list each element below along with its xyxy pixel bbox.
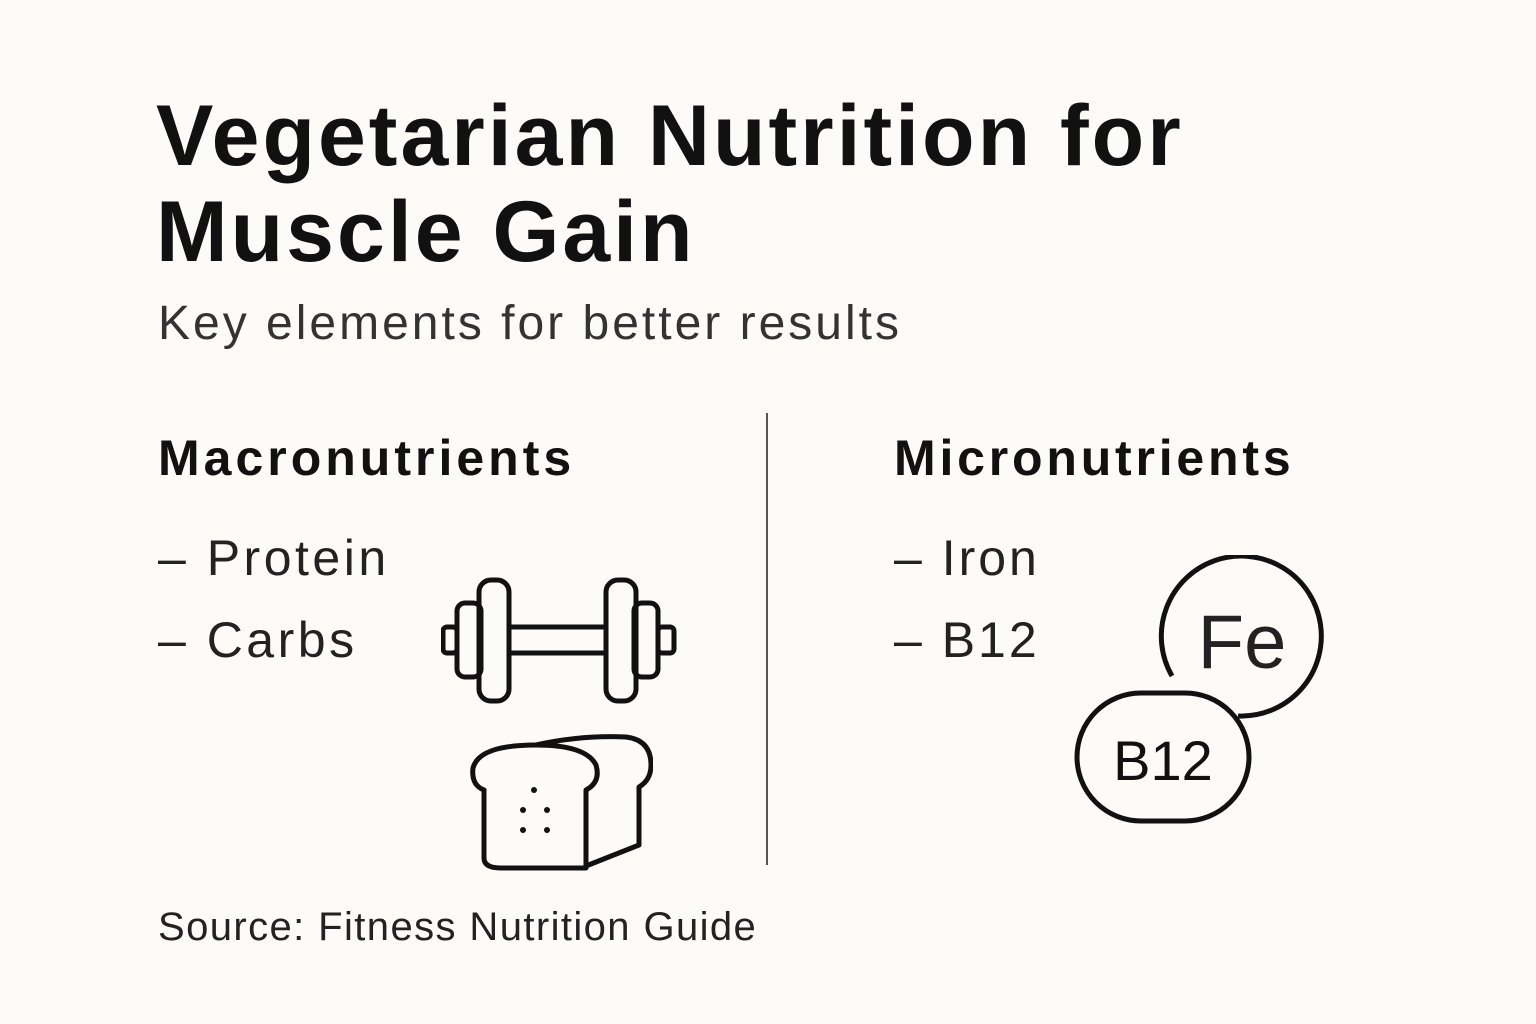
icon: Fe and B12 badges: B12 (1113, 729, 1213, 792)
title: Muscle Gain (156, 184, 696, 280)
panel: micronutrients (894, 430, 1324, 824)
list: macronutrients: – Carbs (158, 612, 358, 668)
source: Source: Fitness Nutrition Guide (158, 905, 757, 949)
icon: dumbbell (441, 578, 676, 704)
panel: macronutrients (158, 430, 676, 870)
icon: Fe and B12 badges: Fe (1198, 600, 1286, 685)
divider (766, 413, 768, 865)
list: micronutrients (894, 530, 1040, 668)
icon: Fe and B12 badges (1074, 555, 1324, 824)
list: macronutrients (158, 530, 390, 668)
heading: micronutrients: Micronutrients (894, 430, 1294, 486)
heading: macronutrients: Macronutrients (158, 430, 575, 486)
list: micronutrients: – B12 (894, 612, 1040, 668)
list: macronutrients: – Protein (158, 530, 390, 586)
title: Vegetarian Nutrition for (156, 88, 1184, 184)
subtitle: Key elements for better results (158, 297, 902, 350)
icon: bread (470, 734, 653, 870)
title (156, 88, 1184, 280)
list: micronutrients: – Iron (894, 530, 1040, 586)
